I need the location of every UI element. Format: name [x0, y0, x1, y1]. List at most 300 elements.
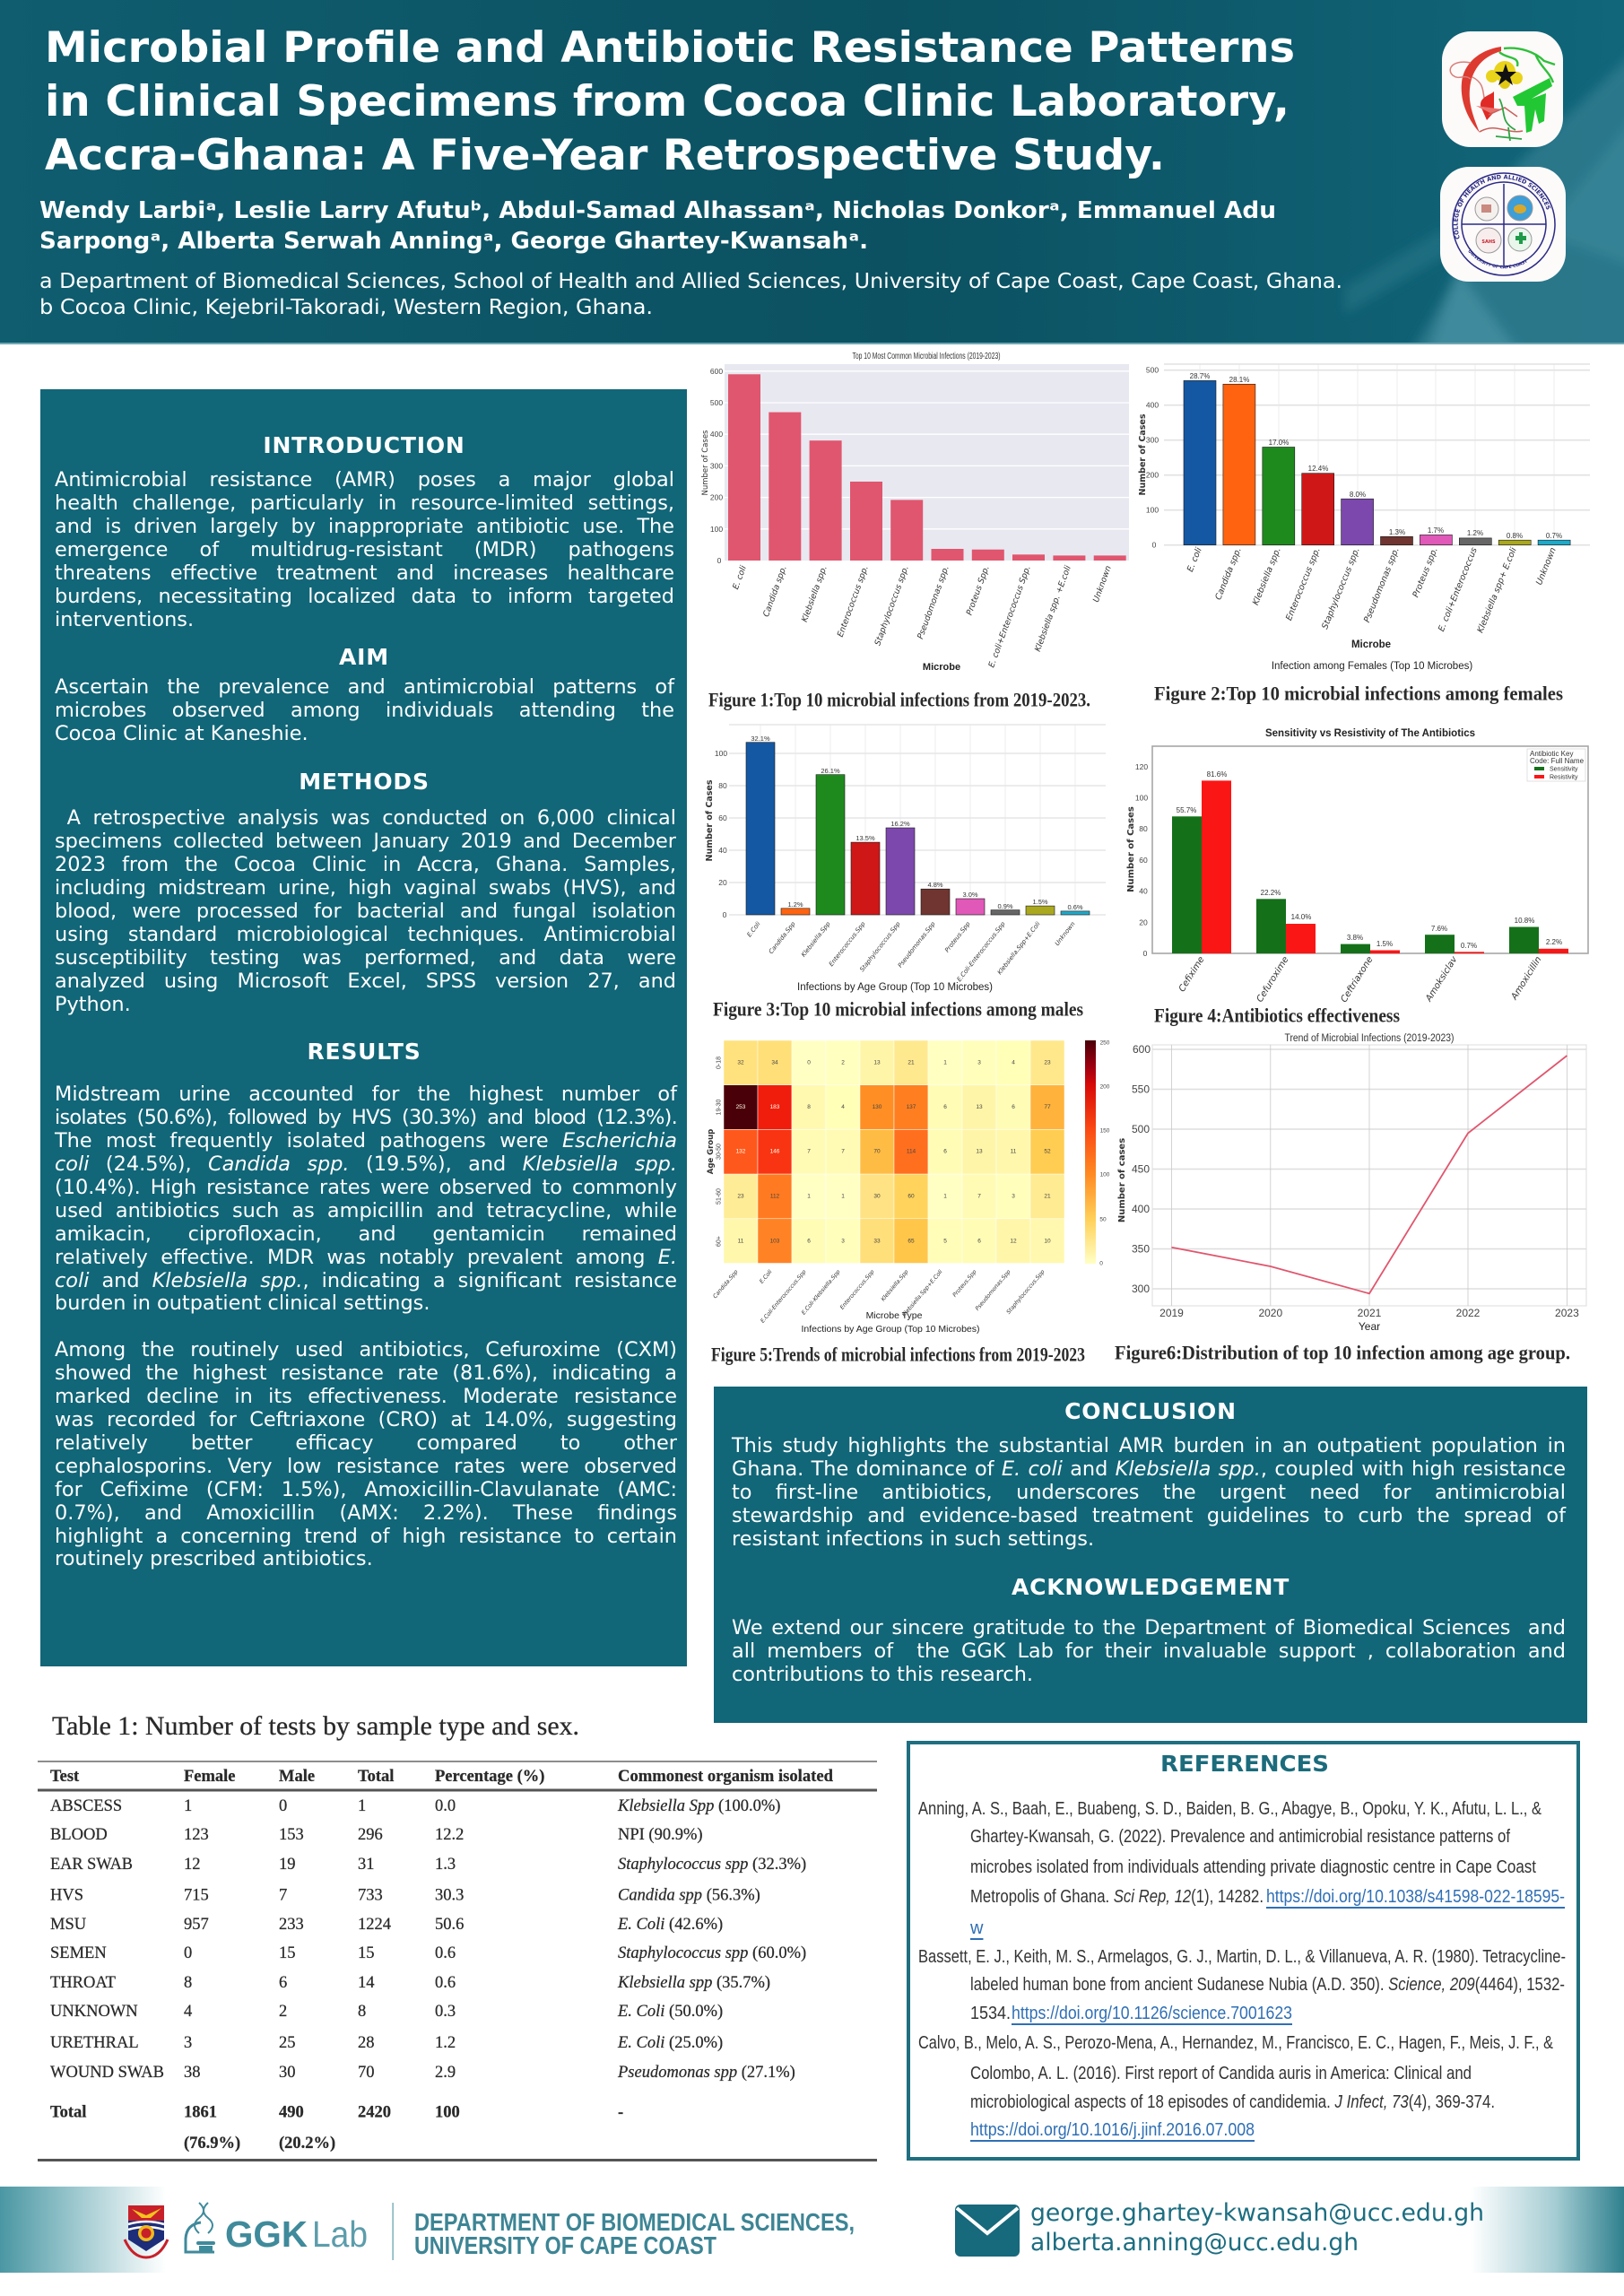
chart 3: infections among males bar chart: 1.2%: [787, 900, 803, 909]
text: results paragraph 2: showed the highest resistance rate (81.6%), indicating a: [55, 1361, 677, 1385]
heading: conclusion: CONCLUSION: [1064, 1398, 1237, 1424]
chart 2: infections among females bar chart: 1.7%: [1428, 526, 1444, 535]
chart 2: infections among females bar chart: Microbe: [1351, 639, 1391, 650]
header banner: [0, 0, 1624, 344]
chart 2: infections among females bar chart: 28.7%: [1190, 372, 1210, 380]
text: introduction: health challenge, particularly in resource-limited settings,: [55, 491, 674, 515]
chart 4: sensitivity vs resistivity grouped bar chart: 100: [1135, 793, 1148, 802]
colour bar: 200: [1100, 1083, 1110, 1091]
chart 1: top 10 microbial infections bar chart: Staphylococcus spp.: [873, 564, 911, 647]
table rows: E. Coli (25.0%): [617, 2034, 723, 2052]
heatmap cells: [724, 1040, 1064, 1263]
text: results paragraph 2: 0.7%), and Amoxicillin (AMX: 2.2%). These findings: [55, 1501, 677, 1525]
authors: Sarpongᵃ, Alberta Serwah Anningᵃ, George Ghartey-Kwansahᵃ.: [39, 228, 868, 255]
caption: figure 1: Figure 1:Top 10 microbial infections from 2019-2023.: [708, 689, 1090, 710]
text: acknowledgement: all members of the GGK Lab for their invaluable support , collaboration and: [732, 1639, 1566, 1663]
chart 5: age group heatmap: 0-18: [716, 1057, 723, 1069]
chart 5: age group heatmap: E.Coli-Enterococcus.Spp: [759, 1268, 808, 1325]
heatmap values: 112: [770, 1193, 780, 1200]
chart 1: top 10 microbial infections bar chart: 500: [710, 398, 723, 407]
text: methods: [55, 806, 676, 1015]
heatmap values: 33: [873, 1238, 881, 1245]
heatmap values: 7: [977, 1193, 981, 1200]
heatmap values: 253: [736, 1104, 746, 1110]
chart 2: infections among females bar chart: 500: [1146, 366, 1159, 375]
text: conclusion: resistant infections in such settings.: [732, 1527, 1094, 1551]
chart 5: age group heatmap: Klebsiella.Spp+E.Coli: [901, 1269, 944, 1318]
text: aim: Ascertain the prevalence and antimicrobial patterns of: [55, 675, 674, 699]
table header row: Commonest organism isolated: [618, 1768, 834, 1786]
chart 4: sensitivity vs resistivity grouped bar chart: 0.7%: [1461, 942, 1477, 950]
heatmap values: 77: [1044, 1104, 1051, 1110]
table rows: MSU: [50, 1916, 86, 1934]
table rows: 28: [358, 2034, 375, 2052]
icon: mail envelope: [955, 2205, 1020, 2257]
heatmap values: 70: [873, 1148, 881, 1155]
heatmap values: 23: [737, 1193, 744, 1200]
contact emails: [1030, 2199, 1484, 2257]
table header row: Test: [50, 1768, 80, 1786]
chart 4: sensitivity vs resistivity grouped bar chart: 81.6%: [1207, 770, 1227, 778]
chart 3: infections among males bar chart: 0.6%: [1067, 903, 1083, 911]
table rows: 957: [184, 1916, 209, 1934]
chart 6: trend of microbial infections line chart: 2023: [1555, 1307, 1579, 1319]
chart 4: sensitivity vs resistivity grouped bar chart: 14.0%: [1291, 913, 1311, 921]
chart 2: infections among females bar chart: E. coli: [1185, 546, 1204, 573]
chart 4: sensitivity vs resistivity grouped bar chart: 60: [1139, 856, 1148, 865]
table rows: 2: [279, 2003, 287, 2021]
table total row: Total: [50, 2104, 86, 2122]
reference: Anning et al: [918, 1799, 1565, 1938]
title: in Clinical Specimens from Cocoa Clinic Laboratory,: [45, 77, 1290, 126]
chart 5: age group heatmap: 19-30: [716, 1099, 723, 1115]
reference: Calvo et al: https://doi.org/10.1016/j.jinf.2016.07.008: [970, 2120, 1255, 2140]
heatmap values: 60: [908, 1193, 915, 1200]
table rows: Klebsiella Spp (100.0%): [617, 1797, 780, 1815]
chart 3: infections among males bar chart: Enterococcus.Spp: [828, 920, 867, 968]
heatmap values: 10: [1044, 1238, 1051, 1245]
chart 4: sensitivity vs resistivity grouped bar chart: Amoxicillin: [1509, 955, 1544, 1003]
chart 2: infections among females bar chart: E. coli+Enterococcus: [1437, 546, 1480, 633]
text: introduction: threatens effective treatment and increases healthcare: [55, 561, 674, 585]
chart 3: infections among males bar chart: 32.1%: [751, 735, 770, 743]
text: methods: susceptibility testing was performed, and data were: [55, 946, 676, 970]
table rows: 0.6: [435, 1974, 456, 1992]
text: methods: specimens collected between January 2019 and December: [55, 830, 676, 853]
table rows: 123: [184, 1826, 209, 1844]
chart 5: age group heatmap: Klebsiella.Spp: [880, 1269, 910, 1302]
table rows: UNKNOWN: [50, 2003, 138, 2021]
chart 4: sensitivity vs resistivity grouped bar chart: [1126, 728, 1588, 1026]
heatmap values: 146: [770, 1148, 780, 1155]
text: results paragraph 2: [55, 1339, 677, 1571]
table rows: 15: [358, 1944, 375, 1962]
logo: GGK Lab: [186, 2203, 368, 2255]
table rows: Staphylococcus spp (60.0%): [618, 1944, 806, 1962]
heading: acknowledgement: ACKNOWLEDGEMENT: [1012, 1574, 1290, 1600]
chart 4: sensitivity vs resistivity grouped bar chart: 22.2%: [1261, 889, 1281, 897]
reference: Bassett et al: https://doi.org/10.1126/science.7001623: [1012, 2004, 1292, 2023]
text: conclusion: [732, 1435, 1566, 1552]
chart 2: infections among females bar chart: 200: [1146, 471, 1159, 480]
heatmap values: 32: [737, 1060, 744, 1065]
text: conclusion: This study highlights the substantial AMR burden in an outpatient population in: [732, 1434, 1566, 1457]
chart 2: infections among females bar chart: Candida spp.: [1213, 546, 1244, 602]
text: results paragraph 1: coli and Klebsiella spp., indicating a significant resistance: [55, 1268, 677, 1292]
chart 3: infections among males bar chart: 80: [718, 781, 727, 790]
table 1: number of tests by sample type and sex: [38, 1711, 877, 2161]
text: introduction: [55, 468, 674, 631]
chart 1: top 10 microbial infections bar chart: Number of Cases: [701, 430, 710, 495]
table rows: 15: [279, 1944, 296, 1962]
table rows: 1: [184, 1797, 192, 1815]
chart 4: sensitivity vs resistivity grouped bar chart: 2.2%: [1546, 938, 1562, 946]
chart 1: top 10 microbial infections bar chart: E. coli+Enterococcus Spp.: [986, 564, 1033, 669]
table total row: 2420: [358, 2104, 391, 2122]
chart 5: age group heatmap: Enterococcus.Spp: [838, 1268, 876, 1311]
table header row: [50, 1768, 834, 1786]
chart 3: infections among males bar chart: Staphylococcus.Spp: [858, 920, 902, 973]
table header row: Female: [184, 1768, 236, 1786]
table total row: (76.9%): [184, 2135, 240, 2152]
chart 6: trend of microbial infections line chart: 400: [1132, 1203, 1150, 1215]
text: acknowledgement: [732, 1617, 1566, 1687]
heatmap values: 6: [943, 1148, 947, 1155]
chart 1: top 10 microbial infections bar chart: Enterococcus spp.: [836, 564, 871, 639]
chart 5: age group heatmap: 51-60: [716, 1188, 723, 1205]
panel: conclusion and acknowledgement: [714, 1387, 1587, 1723]
chart 6: trend of microbial infections line chart: 450: [1132, 1162, 1150, 1175]
table rows: 1: [358, 1797, 366, 1815]
text: aim: [55, 675, 674, 745]
chart 2: infections among females bar chart: 12.4%: [1308, 465, 1328, 473]
heading: methods: METHODS: [299, 769, 430, 795]
heatmap values: 6: [807, 1238, 811, 1245]
legend: Sensitivity: [1550, 766, 1578, 773]
reference: Anning et al: https://doi.org/10.1038/s41598-022-18595-: [1266, 1887, 1565, 1907]
chart 1: top 10 microbial infections bar chart: Klebsiella spp.: [800, 564, 829, 623]
table rows: Candida spp (56.3%): [618, 1887, 760, 1905]
table rows: 4: [184, 2003, 192, 2021]
table rows: 715: [184, 1887, 209, 1905]
chart 5: age group heatmap: Microbe Type: [866, 1310, 923, 1321]
chart 3: infections among males bar chart: 3.0%: [962, 891, 978, 899]
logo: college of health and allied sciences: SAHS: [1481, 239, 1496, 245]
chart 4: sensitivity vs resistivity grouped bar chart: Amoksiclav: [1424, 954, 1460, 1004]
text: acknowledgement: We extend our sincere gratitude to the Department of Biomedical Sciences and: [732, 1616, 1566, 1639]
chart 6: trend of microbial infections line chart: 500: [1132, 1123, 1150, 1135]
chart 2: infections among females bar chart: 400: [1146, 401, 1159, 410]
table rows: 14: [358, 1974, 375, 1992]
heatmap values: 2: [841, 1060, 845, 1065]
chart 3: infections among males bar chart: 40: [718, 846, 727, 855]
chart 1: top 10 microbial infections bar chart: 600: [710, 367, 723, 376]
chart 1: top 10 microbial infections bar chart: Klebsiella spp. +E.coli: [1033, 564, 1073, 653]
table rows: [50, 1797, 806, 2082]
table rows: Klebsiella spp (35.7%): [617, 1974, 770, 1992]
heatmap values: 30: [873, 1193, 881, 1200]
chart 6: trend of microbial infections line chart: Trend of Microbial Infections (2019-2023): [1284, 1033, 1455, 1044]
chart 1: top 10 microbial infections bar chart: 200: [710, 493, 723, 502]
table rows: BLOOD: [50, 1826, 108, 1844]
chart 5: age group heatmap: Staphylococcus.Spp: [1005, 1268, 1046, 1316]
heatmap values: 7: [841, 1148, 845, 1155]
chart 1: top 10 microbial infections bar chart: Candida spp.: [761, 564, 789, 618]
affiliations: [39, 270, 1342, 319]
chart 1: top 10 microbial infections bar chart: Top 10 Most Common Microbial Infections (2019-2023): [852, 352, 1001, 361]
chart 2: infections among females bar chart: 0.7%: [1546, 532, 1562, 540]
chart 3: infections among males bar chart: E.Coli: [745, 920, 762, 938]
chart 2: infections among females bar chart: Pseudomonas spp.: [1362, 546, 1402, 624]
caption: figure 6: Figure6:Distribution of top 10 infection among age group.: [1115, 1342, 1570, 1363]
references panel: [908, 1743, 1578, 2159]
chart 5: age group heatmap: Age Group: [707, 1129, 716, 1174]
table total row: -: [618, 2104, 623, 2122]
reference: Anning et al: Metropolis of Ghana. Sci Rep, 12(1), 14282.: [970, 1887, 1264, 1907]
text: results paragraph 1: The most frequently isolated pathogens were Escherichia: [55, 1129, 677, 1152]
chart 3: infections among males bar chart: Candida.Spp: [768, 920, 797, 955]
heatmap values: 7: [807, 1148, 811, 1155]
heatmap values: 6: [1012, 1104, 1015, 1110]
table rows: 25: [279, 2034, 296, 2052]
table rows: E. Coli (42.6%): [617, 1916, 723, 1934]
heatmap values: 11: [1011, 1148, 1017, 1155]
text: results paragraph 1: [55, 1083, 677, 1316]
reference: Calvo et al: [918, 2033, 1554, 2140]
chart 4: sensitivity vs resistivity grouped bar chart: 20: [1139, 918, 1148, 926]
heatmap values: 3: [1012, 1193, 1015, 1200]
table rows: 70: [358, 2064, 375, 2082]
chart 2: infections among females bar chart: 300: [1146, 436, 1159, 445]
text: conclusion: stewardship and evidence-based treatment guidelines to curb the spread of: [732, 1504, 1566, 1527]
chart 2: infections among females bar chart: 100: [1146, 506, 1159, 515]
chart 3: infections among males bar chart: Number of Cases: [705, 779, 715, 861]
chart 3: infections among males bar chart: 100: [715, 749, 727, 758]
chart 2: infections among females bar chart: Enterococcus spp.: [1284, 546, 1323, 622]
logo: GGK Lab: GGK: [225, 2213, 308, 2255]
table rows: 233: [279, 1916, 304, 1934]
text: methods: A retrospective analysis was conducted on 6,000 clinical: [67, 806, 676, 830]
text: results paragraph 2: for Cefixime (CFM: 1.5%), Amoxicillin-Clavulanate (AMC:: [55, 1478, 677, 1501]
legend: Antibiotic Key: [1530, 750, 1573, 758]
table rows: 733: [358, 1887, 383, 1905]
chart 2: infections among females bar chart: Staphylococcus spp.: [1320, 546, 1362, 631]
table total row: [50, 2104, 623, 2152]
table rows: 31: [358, 1856, 375, 1874]
text: results paragraph 2: relatively better efficacy compared to other: [55, 1431, 677, 1455]
title: [45, 23, 1295, 180]
table rows: EAR SWAB: [50, 1856, 133, 1874]
chart 2: infections among females bar chart: Klebsiella spp+ E.coli: [1476, 546, 1519, 634]
chart 1: top 10 microbial infections bar chart: [701, 352, 1129, 710]
chart 6: trend of microbial infections line chart: Number of cases: [1117, 1138, 1127, 1222]
text: introduction: and is driven largely by inappropriate antibiotic use. The: [55, 515, 674, 538]
text: introduction: burdens, necessitating localized data to inform targeted: [55, 585, 674, 608]
contact emails: george.ghartey-kwansah@ucc.edu.gh: [1030, 2199, 1484, 2227]
table rows: 8: [358, 2003, 366, 2021]
chart 5: age group heatmap: Pseudomonas.Spp: [975, 1269, 1012, 1312]
table header row: Total: [358, 1768, 394, 1786]
chart 3: infections among males bar chart: [705, 725, 1106, 1021]
colour bar: 0: [1099, 1261, 1103, 1266]
logo: molecular ribbon with star: [1442, 31, 1563, 147]
chart 5: age group heatmap: E.Coli-Klebsiella.Spp: [801, 1269, 842, 1316]
chart 4: sensitivity vs resistivity grouped bar chart: 80: [1139, 824, 1148, 833]
heatmap values: 183: [770, 1104, 780, 1110]
table rows: 1.3: [435, 1856, 456, 1874]
chart 2: infections among females bar chart: 0.8%: [1507, 532, 1523, 540]
chart 1: top 10 microbial infections bar chart: Unknown: [1091, 564, 1114, 604]
heatmap values: 132: [736, 1148, 746, 1155]
authors: Wendy Larbiᵃ, Leslie Larry Afutuᵇ, Abdul-Samad Alhassanᵃ, Nicholas Donkorᵃ, Emmanuel Adu: [39, 197, 1276, 224]
chart 3: infections among males bar chart: Klebsiella.Spp: [800, 920, 832, 959]
text: methods: analyzed using Microsoft Excel, SPSS version 27, and: [55, 970, 676, 993]
heatmap values: 103: [770, 1238, 780, 1245]
table rows: 12: [184, 1856, 201, 1874]
chart 6: trend of microbial infections line chart: 300: [1132, 1283, 1150, 1295]
chart 3: infections among males bar chart: Unknown: [1054, 920, 1077, 947]
table rows: 30.3: [435, 1887, 464, 1905]
chart 4: sensitivity vs resistivity grouped bar chart: 120: [1135, 762, 1148, 771]
heatmap values: 1: [807, 1193, 811, 1200]
chart 3: infections among males bar chart: 1.5%: [1032, 898, 1048, 906]
chart 2: infections among females bar chart: 17.0%: [1269, 439, 1289, 447]
affiliations: b Cocoa Clinic, Kejebril-Takoradi, Western Region, Ghana.: [39, 296, 653, 319]
chart 4: sensitivity vs resistivity grouped bar chart: Cefuroxime: [1255, 955, 1291, 1004]
title: Microbial Profile and Antibiotic Resistance Patterns: [45, 23, 1295, 73]
reference: Anning et al: w: [969, 1918, 984, 1938]
chart 2: infections among females bar chart: 28.1%: [1229, 376, 1249, 384]
text: results paragraph 2: Among the routinely used antibiotics, Cefuroxime (CXM): [55, 1338, 677, 1361]
chart 1: top 10 microbial infections bar chart: Microbe: [923, 662, 960, 673]
chart 6: trend of microbial infections line chart: 600: [1133, 1043, 1151, 1056]
chart 2: infections among females bar chart: [1138, 363, 1590, 705]
heatmap values: 0: [807, 1060, 811, 1065]
table rows: 19: [279, 1856, 296, 1874]
heatmap values: 3: [977, 1060, 981, 1065]
chart 3: infections among males bar chart: 13.5%: [855, 834, 875, 842]
text: introduction: emergence of multidrug-resistant (MDR) pathogens: [55, 538, 674, 561]
chart 6: trend of microbial infections line chart: Year: [1359, 1320, 1380, 1333]
text: results paragraph 2: marked decline in its effectiveness. Moderate resistance: [55, 1385, 677, 1408]
reference: Anning et al: microbes isolated from individuals attending private diagnostic centre in Cape Coast: [970, 1857, 1536, 1877]
chart 6: trend of microbial infections line chart: 2019: [1159, 1307, 1184, 1319]
heatmap values: 13: [873, 1060, 881, 1065]
chart 3: infections among males bar chart: Proteus.Spp: [943, 920, 972, 953]
table rows: 6: [279, 1974, 287, 1992]
table title: Table 1: Number of tests by sample type and sex.: [52, 1711, 579, 1741]
table rows: 12.2: [435, 1826, 464, 1844]
table rows: 153: [279, 1826, 304, 1844]
table total row: 490: [279, 2104, 304, 2122]
chart 3: infections among males bar chart: Infections by Age Group (Top 10 Microbes): [797, 982, 993, 993]
chart 4: sensitivity vs resistivity grouped bar chart: Cefixime: [1177, 955, 1207, 994]
heatmap values: 5: [943, 1238, 947, 1245]
table rows: Pseudomonas spp (27.1%): [617, 2064, 795, 2082]
chart 5: age group heatmap: [707, 1040, 1110, 1365]
table rows: 0.6: [435, 1944, 456, 1962]
logo: university crest: [125, 2205, 168, 2257]
text: results paragraph 1: isolates (50.6%), followed by HVS (30.3%) and blood (12.3%).: [55, 1106, 677, 1129]
table rows: 30: [279, 2064, 296, 2082]
text: results paragraph 1: (10.4%). High resistance rates were observed to commonly: [55, 1176, 677, 1199]
chart 6: trend of microbial infections line chart: 2022: [1456, 1307, 1481, 1319]
text: results paragraph 1: used antibiotics such as ampicillin and tetracycline, while: [55, 1199, 677, 1222]
chart 4: sensitivity vs resistivity grouped bar chart: Number of Cases: [1126, 806, 1136, 892]
table rows: WOUND SWAB: [50, 2064, 164, 2082]
heatmap values: 3: [841, 1238, 845, 1245]
text: methods: including midstream urine, high vaginal swabs (HVS), and: [55, 876, 676, 900]
logo: GGK Lab: Lab: [312, 2213, 368, 2255]
chart 3: infections among males bar chart: E.Coli-Enterococcus.Spp: [956, 920, 1007, 983]
table rows: Staphylococcus spp (32.3%): [618, 1856, 806, 1874]
heatmap values: [736, 1060, 1051, 1245]
text: methods: blood, were processed for bacterial and fungal isolation: [55, 900, 676, 923]
title: Accra-Ghana: A Five-Year Retrospective Study.: [45, 131, 1165, 180]
chart 6: trend of microbial infections line chart: [1115, 1033, 1586, 1363]
heatmap values: 13: [976, 1104, 983, 1110]
chart 2: infections among females bar chart: Unknown: [1534, 546, 1559, 587]
legend: Resistivity: [1550, 775, 1578, 780]
text: results paragraph 1: burden in outpatient clinical settings.: [55, 1292, 430, 1315]
heatmap values: 65: [908, 1238, 915, 1245]
table rows: 1224: [358, 1916, 391, 1934]
department name: UNIVERSITY OF CAPE COAST: [414, 2231, 716, 2259]
reference: Calvo et al: microbiological aspects of 18 episodes of candidemia. J Infect, 73(4), 369-374.: [970, 2092, 1495, 2112]
reference: Anning et al: Ghartey-Kwansah, G. (2022). Prevalence and antimicrobial resistance patterns of: [970, 1827, 1510, 1847]
table rows: 7: [279, 1887, 287, 1905]
text: results paragraph 1: coli (24.5%), Candida spp. (19.5%), and Klebsiella spp.: [55, 1152, 677, 1176]
heatmap values: 6: [943, 1104, 947, 1110]
table rows: 8: [184, 1974, 192, 1992]
heatmap values: 8: [807, 1104, 811, 1110]
heatmap values: 137: [907, 1104, 916, 1110]
heading: results: RESULTS: [307, 1039, 421, 1065]
text: results paragraph 1: Midstream urine accounted for the highest number of: [55, 1083, 677, 1106]
legend: [1527, 749, 1585, 781]
text: results paragraph 2: cephalosporins. Very low resistance rates were observed: [55, 1455, 677, 1478]
text: aim: microbes observed among individuals attending the: [55, 699, 674, 722]
affiliations: a Department of Biomedical Sciences, School of Health and Allied Sciences, University of Cape Coast, Cape Coast, Ghana.: [39, 270, 1342, 293]
text: methods: using standard microbiological techniques. Antimicrobial: [55, 923, 676, 946]
chart 1: top 10 microbial infections bar chart: Pseudomonas spp.: [916, 564, 951, 640]
heatmap values: 34: [771, 1060, 778, 1065]
chart 3: infections among males bar chart: Klebsiella.Spp+E.Coli: [996, 920, 1042, 976]
chart 1: top 10 microbial infections bar chart: 400: [710, 430, 723, 439]
department name: DEPARTMENT OF BIOMEDICAL SCIENCES,: [414, 2208, 855, 2236]
chart 5: age group heatmap: 30-50: [716, 1144, 723, 1160]
table rows: NPI (90.9%): [618, 1826, 703, 1844]
table rows: 2.9: [435, 2064, 456, 2082]
chart 2: infections among females bar chart: Number of Cases: [1138, 413, 1148, 495]
chart 6: trend of microbial infections line chart: 2021: [1358, 1307, 1382, 1319]
chart 1: top 10 microbial infections bar chart: Proteus Spp.: [965, 564, 992, 617]
reference: Calvo et al: Colombo, A. L. (2016). First report of Candida auris in America: Clinical and: [970, 2064, 1472, 2083]
chart 2: infections among females bar chart: Infection among Females (Top 10 Microbes): [1272, 661, 1472, 672]
table rows: 50.6: [435, 1916, 464, 1934]
heatmap values: 21: [908, 1060, 915, 1065]
chart 4: sensitivity vs resistivity grouped bar chart: 55.7%: [1177, 806, 1196, 814]
chart 1: top 10 microbial infections bar chart: 300: [710, 461, 723, 470]
colour bar: 150: [1100, 1128, 1110, 1134]
table rows: 296: [358, 1826, 383, 1844]
chart 2: infections among females bar chart: 1.3%: [1389, 528, 1405, 536]
chart 3: infections among males bar chart: 0.9%: [997, 902, 1013, 910]
chart 6: trend of microbial infections line chart: 550: [1132, 1083, 1150, 1096]
chart 2: infections among females bar chart: Klebsiella spp.: [1251, 546, 1283, 606]
chart 2: infections among females bar chart: 0: [1152, 541, 1157, 550]
chart 3: infections among males bar chart: Pseudomonas.Spp: [897, 920, 937, 969]
